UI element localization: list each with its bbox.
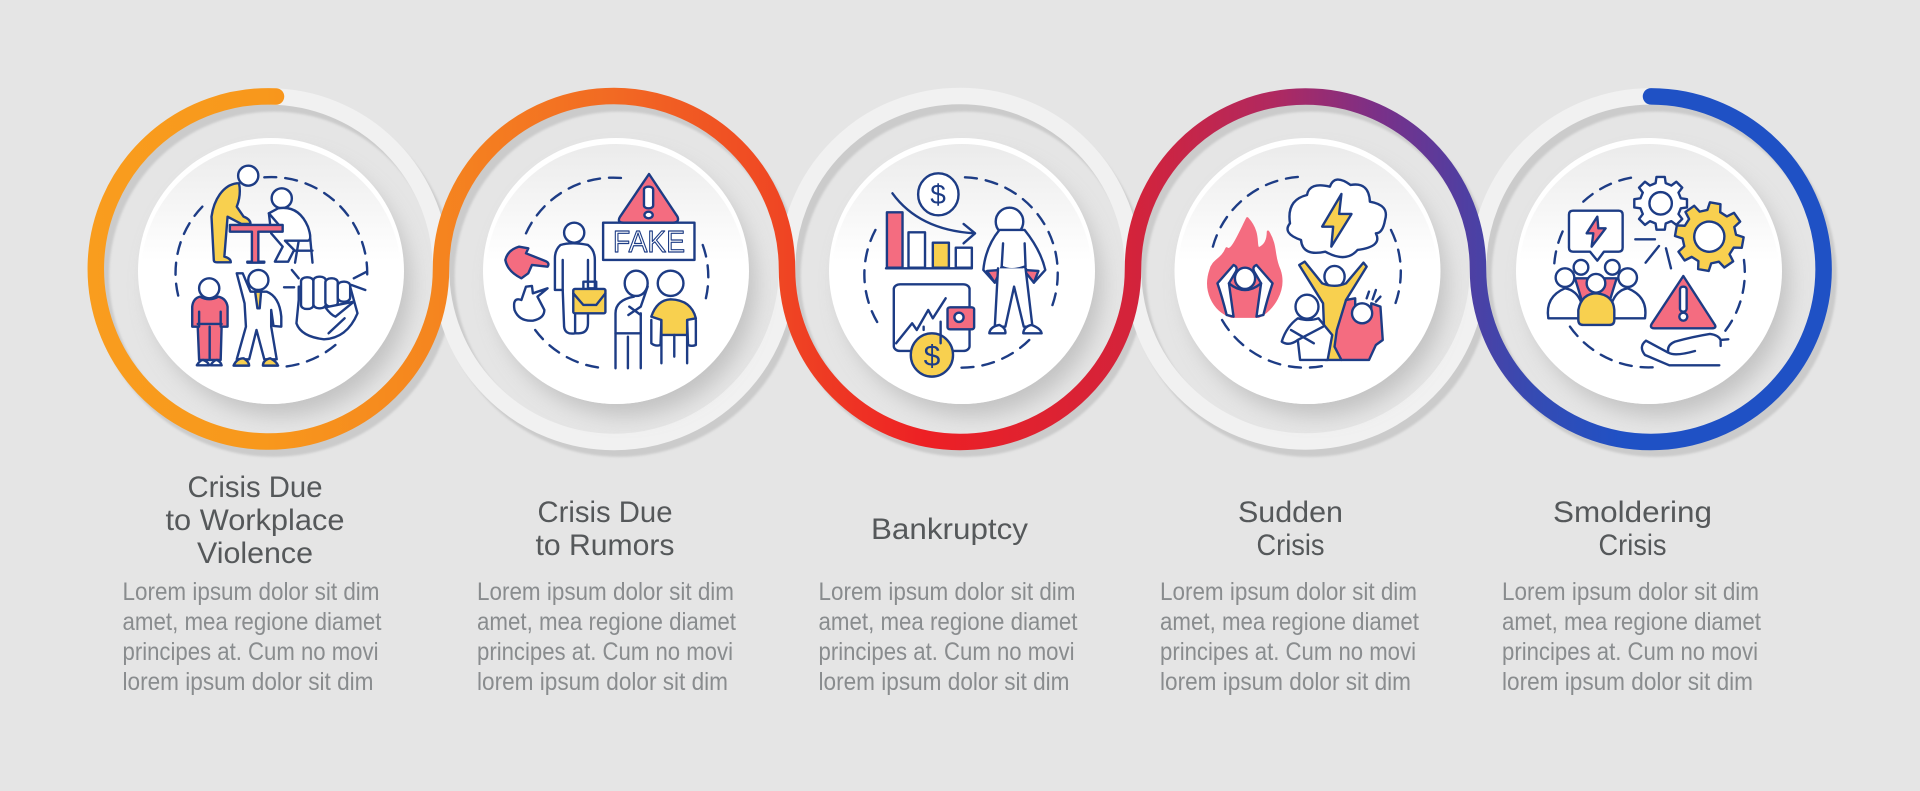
icon: workplace violence [176, 166, 367, 367]
text block: workplace violence [122, 471, 382, 696]
icon: smoldering crisis [1548, 177, 1749, 367]
body: principes at. Cum no movi [1502, 638, 1758, 666]
disc shadows [149, 154, 1789, 416]
ring shadows [101, 103, 1829, 449]
icon: sudden crisis [1208, 177, 1401, 368]
body [122, 578, 382, 696]
body: principes at. Cum no movi [122, 638, 378, 666]
icon: rumors: FAKE [613, 224, 685, 259]
heading: to Workplace [166, 504, 344, 537]
heading [166, 471, 344, 570]
body: Lorem ipsum dolor sit dim [1502, 578, 1759, 606]
body: Lorem ipsum dolor sit dim [1160, 578, 1417, 606]
body: lorem ipsum dolor sit dim [477, 668, 728, 696]
icon: bankruptcy [864, 173, 1058, 377]
body: amet, mea regione diamet [818, 608, 1078, 636]
body: amet, mea regione diamet [477, 608, 736, 636]
icon: bankruptcy: $ [924, 340, 941, 373]
body: Lorem ipsum dolor sit dim [477, 578, 734, 606]
text block: smoldering crisis [1502, 496, 1761, 696]
heading: Violence [197, 537, 313, 570]
icon: rumors [505, 174, 708, 368]
heading: to Rumors [536, 529, 674, 562]
heading [536, 496, 674, 562]
body: Lorem ipsum dolor sit dim [818, 578, 1076, 606]
heading: Smoldering [1553, 496, 1712, 529]
icon: bankruptcy: $ [930, 179, 946, 210]
heading: Crisis [1256, 529, 1324, 562]
body: lorem ipsum dolor sit dim [818, 668, 1070, 696]
coloured timeline ribbon [96, 96, 1824, 442]
body: Lorem ipsum dolor sit dim [122, 578, 380, 606]
text block: rumors [477, 496, 736, 696]
heading: Crisis Due [188, 471, 322, 504]
text block: bankruptcy [818, 513, 1078, 696]
heading: Sudden [1238, 496, 1343, 529]
heading: Bankruptcy [871, 513, 1028, 546]
body [1502, 578, 1761, 696]
heading [1238, 496, 1343, 562]
heading: Crisis [1598, 529, 1666, 562]
body: principes at. Cum no movi [818, 638, 1074, 666]
body: amet, mea regione diamet [122, 608, 382, 636]
body: amet, mea regione diamet [1502, 608, 1761, 636]
body: amet, mea regione diamet [1160, 608, 1419, 636]
body: lorem ipsum dolor sit dim [122, 668, 374, 696]
light track of the timeline [270, 96, 1651, 442]
text block: sudden crisis [1160, 496, 1419, 696]
body: lorem ipsum dolor sit dim [1502, 668, 1753, 696]
body [818, 578, 1078, 696]
body [477, 578, 736, 696]
body: principes at. Cum no movi [1160, 638, 1416, 666]
heading: Crisis Due [538, 496, 672, 529]
body: lorem ipsum dolor sit dim [1160, 668, 1411, 696]
heading [1553, 496, 1712, 562]
body [1160, 578, 1419, 696]
body: principes at. Cum no movi [477, 638, 733, 666]
discs [138, 138, 1782, 404]
